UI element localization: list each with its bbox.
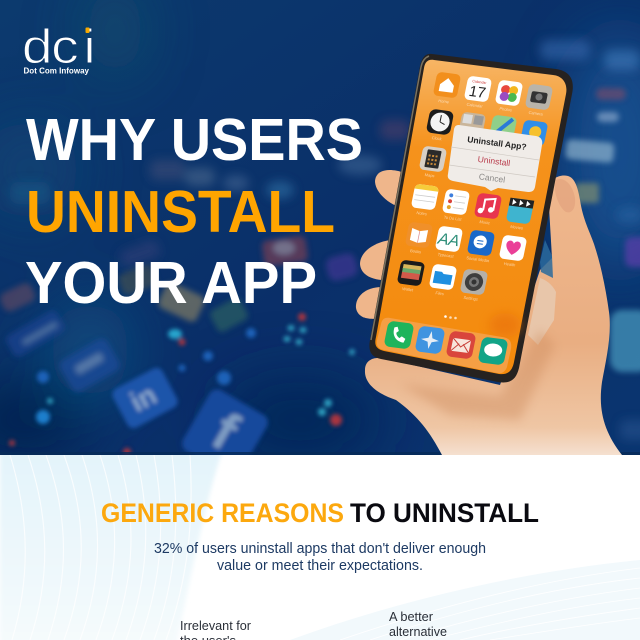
reason: better alternative: alternative bbox=[389, 624, 447, 639]
hero background bbox=[0, 0, 640, 480]
icon: calculator top bbox=[458, 112, 486, 138]
title: WHY USERS bbox=[26, 106, 363, 173]
icon: clock bbox=[424, 109, 454, 142]
icon: social media bbox=[465, 230, 496, 263]
title: YOUR APP bbox=[25, 249, 317, 316]
icon: settings bbox=[458, 269, 488, 302]
phone body bbox=[369, 54, 573, 382]
icon: maps bbox=[489, 115, 517, 141]
icon: movies bbox=[504, 198, 534, 231]
section description bbox=[154, 541, 486, 574]
icon: health bbox=[497, 235, 527, 268]
section heading: GENERIC REASONS bbox=[101, 498, 344, 528]
icon: calculator bbox=[417, 146, 447, 179]
icon: books: Books bbox=[410, 248, 422, 254]
icon: mail bbox=[446, 331, 476, 359]
icon: settings: Settings bbox=[463, 295, 478, 302]
icon: reminders bbox=[440, 189, 470, 222]
hand holding phone bbox=[356, 170, 622, 455]
icon: files: Files bbox=[435, 290, 444, 296]
icon: camera: Camera bbox=[528, 110, 544, 117]
hero background: f bbox=[202, 401, 249, 463]
icon: home: Home bbox=[438, 98, 450, 104]
icon: calculator: Maps bbox=[424, 172, 435, 178]
section heading bbox=[101, 498, 539, 528]
icon: fonts bbox=[433, 226, 463, 259]
title: UNINSTALL bbox=[26, 178, 335, 245]
phone screen bbox=[375, 60, 566, 374]
phone bbox=[369, 54, 573, 382]
icon: fonts: Typecast bbox=[437, 252, 455, 259]
dock bbox=[377, 318, 511, 373]
reasons section background bbox=[0, 440, 640, 640]
tiles: lower-left social icons bbox=[4, 309, 122, 394]
icon: books bbox=[403, 222, 433, 255]
palm and thumb bbox=[365, 176, 622, 455]
icon: home bbox=[431, 72, 461, 105]
title bbox=[25, 106, 363, 316]
logo: Dot Com Infoway bbox=[24, 66, 90, 76]
section description: value or meet their expectations. bbox=[217, 558, 423, 574]
icon: calendar bbox=[462, 76, 492, 109]
section heading: TO UNINSTALL bbox=[350, 498, 539, 528]
icon: health: Health bbox=[503, 261, 516, 267]
glowing dots bbox=[9, 313, 355, 456]
palm shading bbox=[400, 330, 555, 420]
icon: weather bbox=[520, 120, 548, 146]
icon: calendar: 17 bbox=[467, 83, 487, 102]
icon: photos: Photos bbox=[499, 106, 512, 112]
icon: music: Music bbox=[479, 219, 490, 225]
icon: calendar: Calendar bbox=[472, 79, 488, 85]
uninstall dialog: Uninstall App? bbox=[467, 134, 527, 152]
fingers bbox=[356, 170, 414, 319]
section description: 32% of users uninstall apps that don't deliver enough bbox=[154, 541, 486, 557]
uninstall dialog bbox=[448, 125, 542, 192]
reason: better alternative: A better bbox=[389, 609, 434, 624]
icon: notes: Notes bbox=[416, 210, 427, 216]
icon: clock: Clock bbox=[431, 135, 442, 141]
icon: notes bbox=[409, 184, 439, 217]
icon: movies: Movies bbox=[510, 224, 523, 230]
icon: fonts: AA bbox=[435, 231, 461, 250]
app icons bbox=[395, 72, 553, 302]
reason: better alternative bbox=[389, 609, 447, 639]
fingers behind palm bbox=[528, 278, 556, 345]
icon: music bbox=[472, 193, 502, 226]
icon: calendar: Calendar bbox=[466, 102, 484, 109]
logo: dci bbox=[22, 19, 96, 73]
icon: files bbox=[427, 264, 457, 297]
icon: wallet: Wallet bbox=[402, 286, 415, 292]
reason: irrelevant bbox=[180, 618, 252, 640]
icon: phone bbox=[384, 321, 414, 349]
icon: social media: Social Media bbox=[466, 255, 490, 263]
blue gap between phone and thumb bbox=[540, 240, 553, 278]
icon: reminders: To Do List bbox=[443, 215, 463, 222]
icon: messages bbox=[478, 337, 508, 365]
icon: camera bbox=[523, 84, 553, 117]
icon: photos bbox=[493, 80, 523, 113]
phone side edge bbox=[371, 56, 429, 340]
icon: safari bbox=[415, 326, 445, 354]
reason: irrelevant: Irrelevant for bbox=[180, 618, 252, 633]
uninstall dialog: Cancel bbox=[478, 171, 506, 185]
hero background: in bbox=[125, 379, 162, 418]
page dots bbox=[444, 315, 457, 319]
icon: wallet bbox=[395, 260, 425, 293]
uninstall dialog: Uninstall bbox=[477, 154, 511, 168]
thumb nail bbox=[555, 179, 575, 212]
blurred app tiles bbox=[10, 40, 640, 440]
